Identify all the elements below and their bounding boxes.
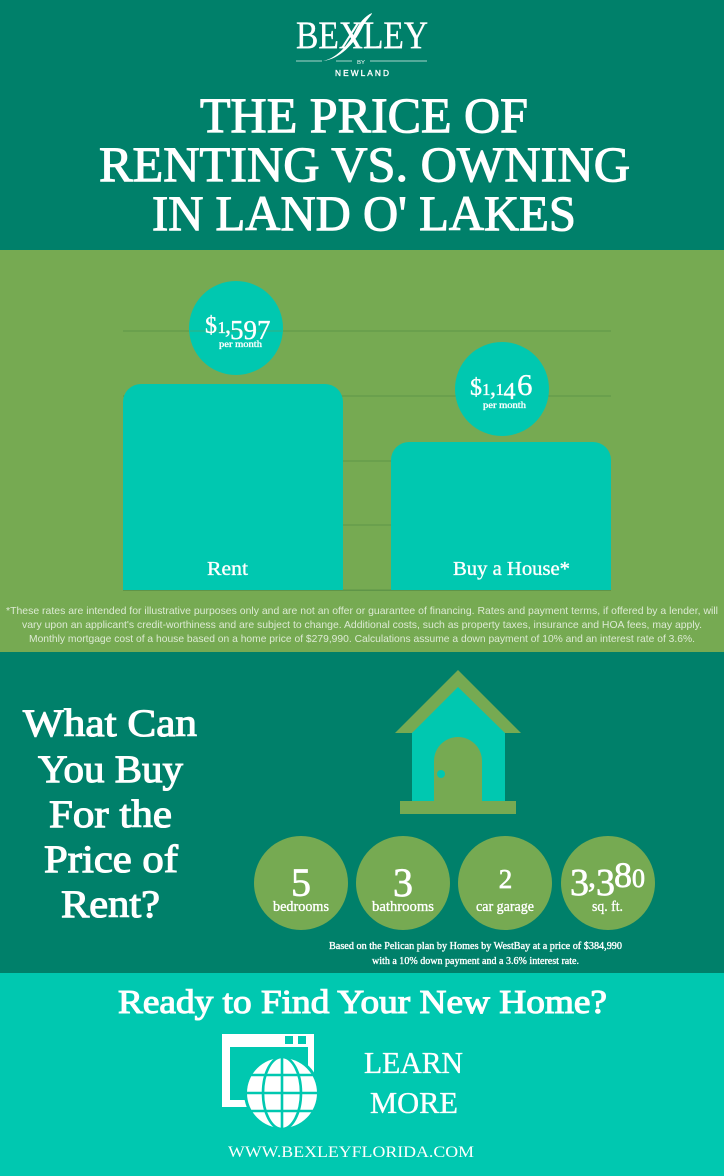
callout: rent price: 1 [218,318,226,337]
title: RENTING VS. OWNING [99,136,630,192]
logo: Bexley by Newland: BEXLEY [296,14,428,57]
footnote [329,941,622,967]
stat: square feet: , [588,858,596,894]
stat: bedrooms: 5 [291,860,311,905]
callout: buy price: 4 [504,379,516,405]
disclaimer text: Monthly mortgage cost of a house based on a home price of $279,990. Calculations assume a down payment of 10% and an interest rate of 3.6%. [29,634,695,645]
footnote: with a 10% down payment and a 3.6% interest rate. [372,956,579,967]
header panel [0,0,724,250]
panel: call to action [0,973,724,1176]
stat: bathrooms: 3 [393,860,413,905]
learn more label [364,1045,463,1120]
stat: bedrooms: bedrooms [273,899,329,915]
bar: buy a house [391,442,611,590]
callout: rent price: per month [219,340,262,350]
stat: square feet [561,836,655,930]
disclaimer text: vary upon an applicant's credit-worthiness and are subject to change. Additional costs, such as property taxes, insurance and HOA fees, may apply. [22,620,702,631]
callout: buy price: 1 [496,380,504,399]
stat: square feet: 3 [596,862,615,904]
heading: Rent? [61,883,160,926]
stat: bedrooms [254,836,348,930]
stat: car garage: 2 [499,864,512,894]
footnote: Based on the Pelican plan by Homes by WestBay at a price of $384,990 [329,941,622,952]
callout: buy price: , [490,375,496,401]
heading: What Can [23,702,197,745]
stat: bathrooms: bathrooms [372,899,434,915]
heading: Price of [44,838,178,881]
stat: square feet: 3 [570,862,589,904]
stat: bathrooms [356,836,450,930]
callout: buy price: 1 [482,380,490,399]
bar: rent [123,384,343,590]
panel: price comparison [0,250,724,652]
panel: what can you buy [0,652,724,973]
callout: buy price: $ [470,375,482,401]
stat: square feet: sq. ft. [592,899,623,915]
bar: rent: Rent [207,558,248,580]
callout: buy price: per month [483,401,526,411]
callout: rent price: 597 [230,315,270,345]
heading: For the [49,793,172,836]
logo: Bexley by Newland: BY [357,60,366,66]
stat: square feet: 0 [632,864,645,893]
title: THE PRICE OF [200,87,528,143]
heading: You Buy [38,748,184,791]
logo: Bexley by Newland: NEWLAND [335,68,389,78]
icon: house [395,670,521,814]
stat: car garage [458,836,552,930]
callout: rent price: $ [205,313,217,339]
disclaimer text: *These rates are intended for illustrative purposes only and are not an offer or guarantee of financing. Rates and payment terms, if offered by a lender, will [6,606,718,617]
callout: buy price: 6 [517,367,532,402]
learn more label: LEARN [364,1045,463,1080]
learn more label: MORE [370,1085,458,1120]
title: IN LAND O' LAKES [152,185,576,241]
website url: WWW.BEXLEYFLORIDA.COM [228,1144,474,1161]
bar chart [123,281,611,591]
heading: Ready to Find Your New Home? [118,984,607,1021]
callout: buy price [455,342,549,436]
disclaimer text [6,606,718,645]
logo: Bexley by Newland [296,13,428,78]
stat: car garage: car garage [476,899,534,915]
heading [23,702,197,926]
icon: web globe [222,1034,320,1131]
callout: rent price: , [225,313,231,339]
bar: buy a house: Buy a House* [453,558,570,580]
title [99,87,630,241]
stat: square feet: 8 [614,855,632,895]
callout: rent price [189,281,283,375]
